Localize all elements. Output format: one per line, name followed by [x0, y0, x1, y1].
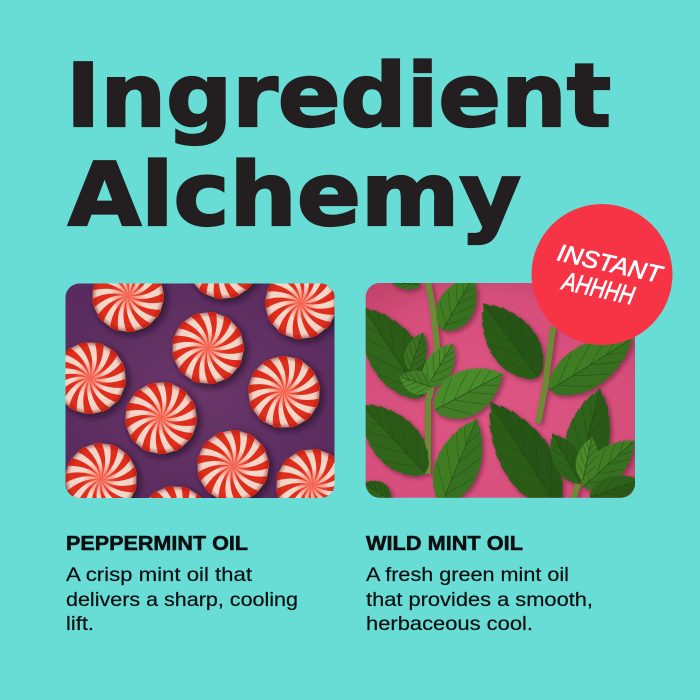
text block: wild mint oil: that provides a smooth, — [366, 589, 593, 611]
badge: instant ahhh: AHHHH — [558, 265, 638, 311]
photo: wild mint leaves — [366, 283, 635, 498]
badge: instant ahhh: INSTANT — [555, 239, 666, 289]
title: Ingredient — [66, 45, 611, 147]
mint sprigs — [366, 283, 635, 498]
badge: instant ahhh — [532, 204, 672, 345]
text block: wild mint oil: A fresh green mint oil — [366, 564, 569, 586]
text block: wild mint oil — [366, 533, 593, 635]
text block: peppermint oil: PEPPERMINT OIL — [66, 533, 248, 555]
photo: peppermint candies — [66, 284, 334, 498]
text block: peppermint oil: delivers a sharp, cooling — [66, 589, 298, 611]
candies — [66, 284, 334, 498]
text block: wild mint oil: herbaceous cool. — [366, 613, 533, 635]
text block: wild mint oil: WILD MINT OIL — [366, 533, 523, 555]
text block: peppermint oil — [66, 533, 298, 635]
title — [66, 45, 611, 246]
text block: peppermint oil: A crisp mint oil that — [66, 564, 253, 586]
title: Alchemy — [68, 144, 521, 246]
text block: peppermint oil: lift. — [66, 613, 94, 635]
